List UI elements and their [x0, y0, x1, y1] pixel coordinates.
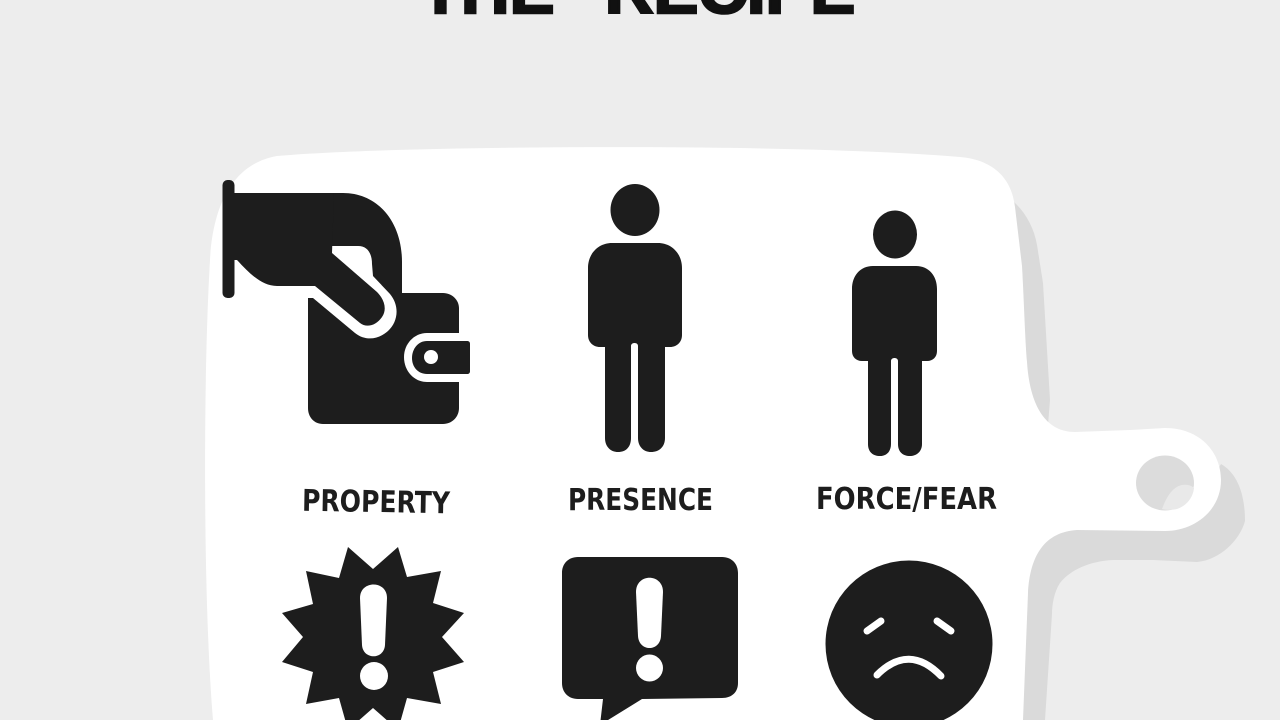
icon: person large	[588, 184, 682, 452]
label: force/fear: FORCE/FEAR	[816, 482, 997, 517]
icon: hand taking wallet	[222, 180, 470, 424]
icon: speech bubble exclamation	[562, 557, 738, 720]
cutting board	[205, 147, 1221, 720]
cutting board shadow	[1000, 201, 1245, 720]
hanging hole	[1136, 456, 1194, 510]
icon: starburst exclamation	[282, 547, 464, 720]
icon: person small	[852, 210, 937, 456]
label: presence: PRESENCE	[568, 483, 713, 518]
label: property: PROPERTY	[302, 484, 451, 521]
icon: sad face	[826, 560, 992, 720]
